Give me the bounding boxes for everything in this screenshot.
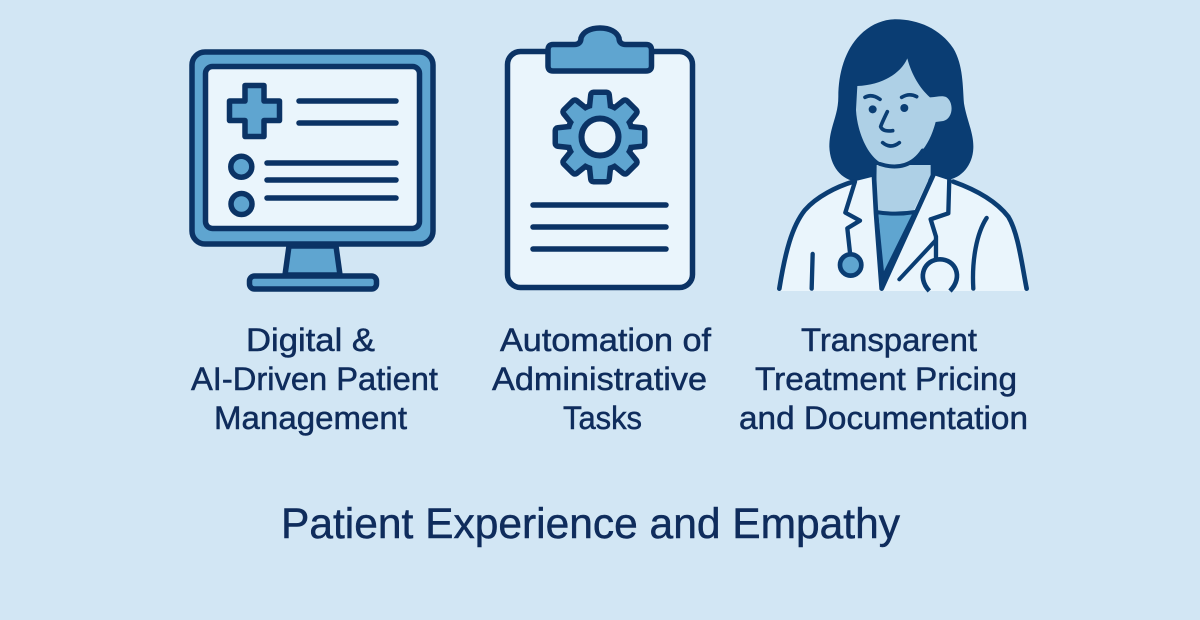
icon: clipboard with gear <box>508 28 692 288</box>
monitor base <box>250 276 376 289</box>
coat centre v <box>874 175 933 289</box>
clipboard board <box>508 52 692 288</box>
gear fill <box>558 95 642 179</box>
mouth <box>883 143 899 146</box>
hair <box>829 19 973 182</box>
label: digital and AI patient management <box>191 322 438 436</box>
brows <box>865 95 917 99</box>
left sleeve line <box>805 254 819 289</box>
white coat right fill <box>882 175 1027 291</box>
coat right shoulder <box>953 182 1027 289</box>
right sleeve line <box>973 218 987 289</box>
label: automation of administrative tasks <box>492 322 711 436</box>
label: automation of administrative tasks: Administrative <box>492 361 707 397</box>
label: digital and AI patient management: Digital & <box>246 322 375 358</box>
label: transparent treatment pricing and documentation <box>739 322 1028 436</box>
left eye <box>869 105 877 113</box>
right lapel <box>931 178 949 258</box>
stethoscope tube <box>899 240 936 279</box>
gear hole <box>582 118 618 156</box>
label: transparent treatment pricing and documentation: Treatment Pricing <box>755 361 1017 397</box>
label: automation of administrative tasks: Automation of <box>500 322 711 358</box>
left lapel and stethoscope tube <box>845 182 860 253</box>
icon: doctor portrait <box>778 19 1027 291</box>
bullet one <box>231 156 252 177</box>
face <box>856 58 952 165</box>
label: transparent treatment pricing and documentation: Transparent <box>801 322 977 358</box>
label: digital and AI patient management: AI-Driven Patient <box>191 361 438 397</box>
medical cross <box>230 86 280 136</box>
white coat left fill <box>778 177 882 291</box>
monitor frame <box>192 52 433 244</box>
stethoscope ring <box>923 259 957 291</box>
icon: computer monitor with patient record <box>192 52 433 289</box>
neck <box>876 165 931 212</box>
label: digital and AI patient management: Management <box>214 400 407 436</box>
coat left shoulder <box>779 182 853 289</box>
shirt <box>876 212 915 278</box>
stethoscope chest piece <box>840 254 861 276</box>
monitor stand <box>285 246 340 275</box>
clipboard clip <box>548 28 652 71</box>
record lines <box>267 101 396 198</box>
right eye <box>900 104 908 112</box>
clipboard text lines <box>533 205 666 249</box>
screen panel <box>206 66 420 228</box>
label: transparent treatment pricing and documentation: and Documentation <box>739 400 1028 436</box>
gear outline <box>558 95 642 179</box>
nose <box>881 112 893 131</box>
bullet two <box>231 194 252 214</box>
heading: patient experience and empathy: Patient Experience and Empathy <box>281 500 900 548</box>
jaw line <box>880 151 923 166</box>
label: automation of administrative tasks: Tasks <box>563 400 642 436</box>
